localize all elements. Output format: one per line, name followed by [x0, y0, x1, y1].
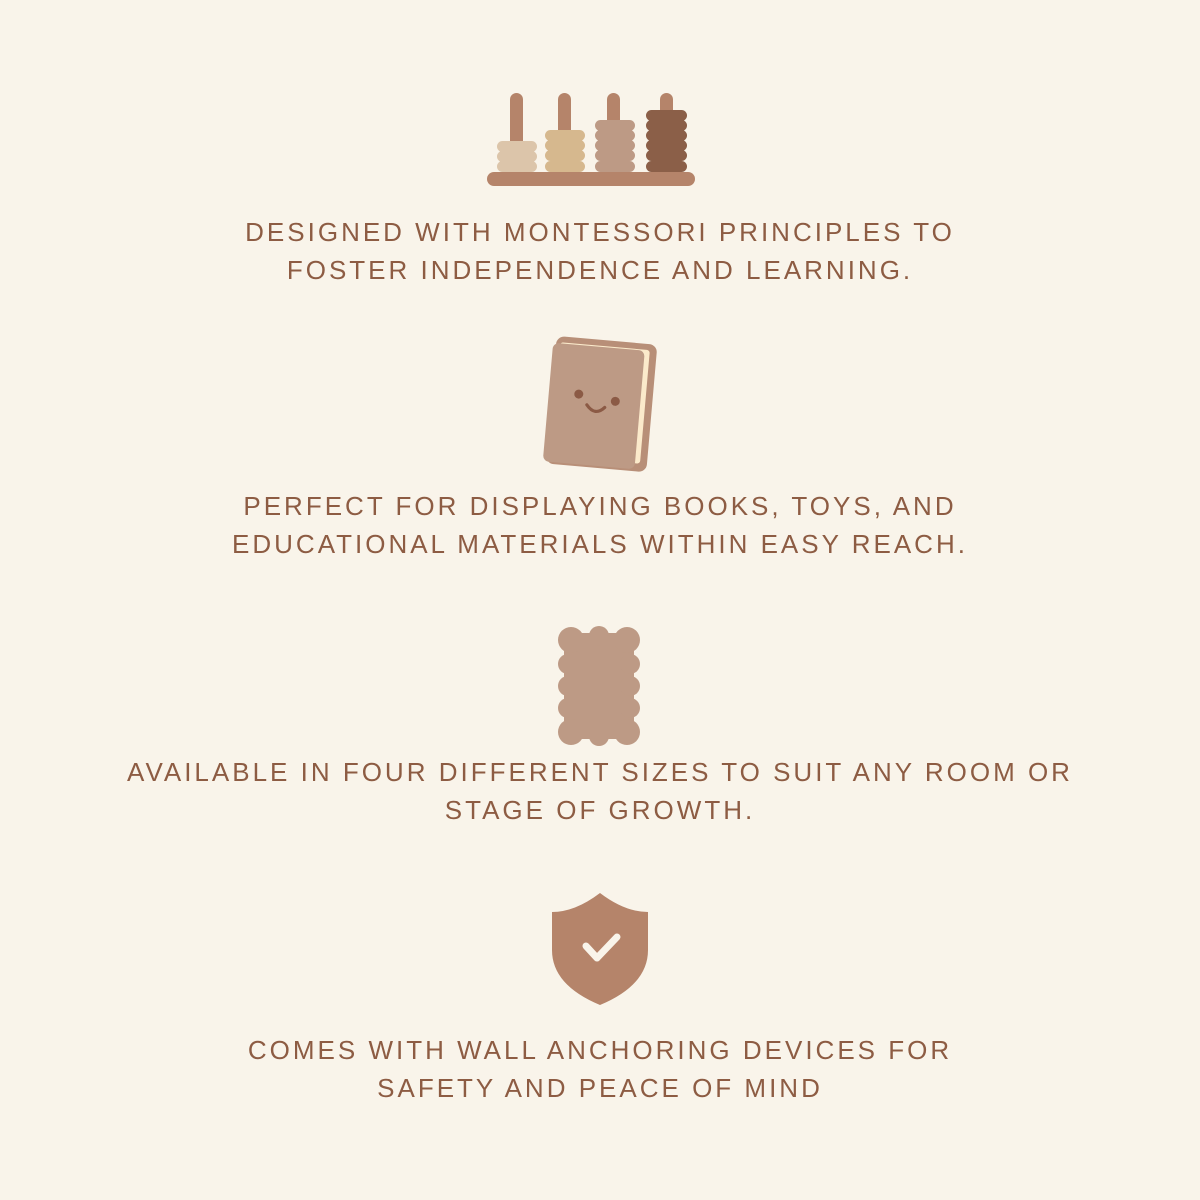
- text: sizes: AVAILABLE IN FOUR DIFFERENT SIZES TO SUIT ANY ROOM OR: [127, 757, 1073, 787]
- text: montessori: FOSTER INDEPENDENCE AND LEARNING.: [287, 255, 913, 285]
- text: anchoring: [248, 1035, 952, 1103]
- text: anchoring: SAFETY AND PEACE OF MIND: [377, 1073, 823, 1103]
- text: displaying: PERFECT FOR DISPLAYING BOOKS, TOYS, AND: [243, 491, 957, 521]
- text: sizes: [127, 757, 1073, 825]
- text: anchoring: COMES WITH WALL ANCHORING DEVICES FOR: [248, 1035, 952, 1065]
- text: displaying: EDUCATIONAL MATERIALS WITHIN EASY REACH.: [232, 529, 968, 559]
- text: montessori: [245, 217, 955, 285]
- text: sizes: STAGE OF GROWTH.: [445, 795, 755, 825]
- text: montessori: DESIGNED WITH MONTESSORI PRINCIPLES TO: [245, 217, 955, 247]
- text: displaying: [232, 491, 968, 559]
